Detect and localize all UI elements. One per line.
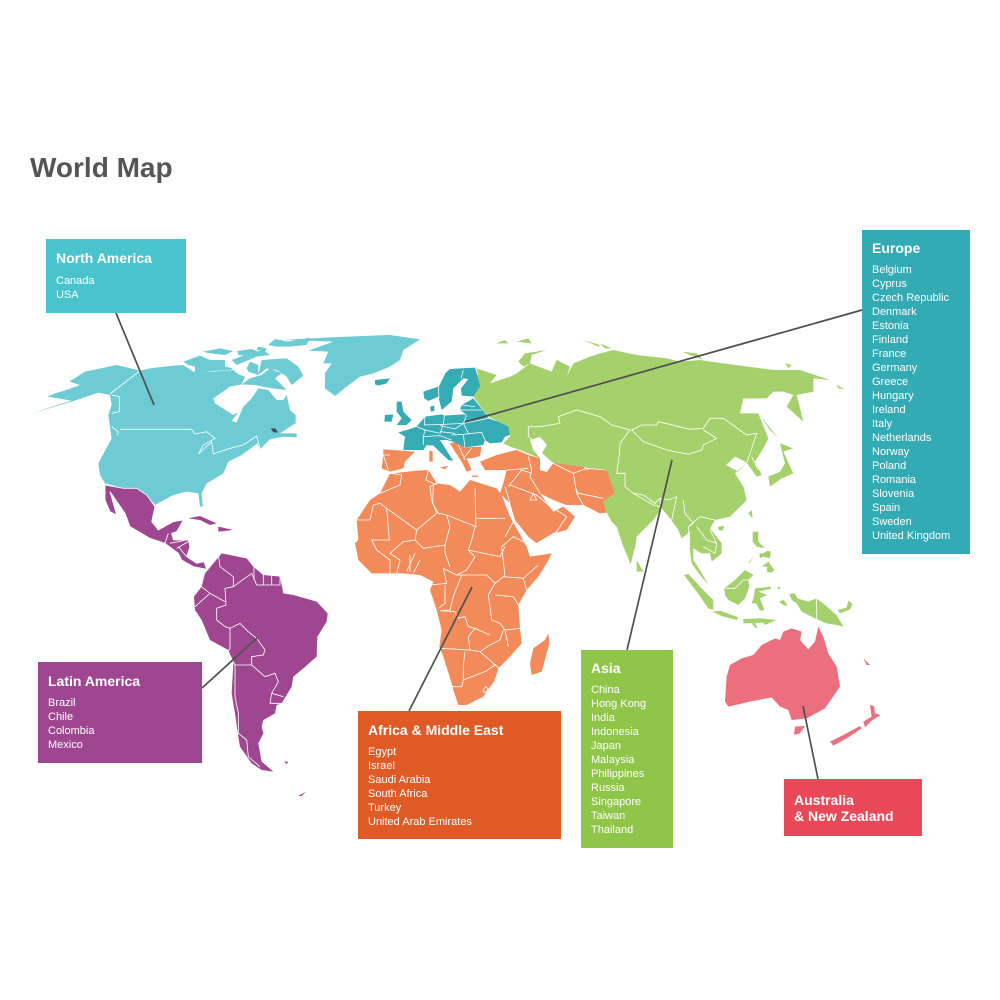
Africa (355, 470, 552, 705)
panel: North America: Canada USA (56, 275, 95, 301)
panel: Europe (862, 230, 970, 554)
title: World Map (30, 152, 173, 183)
Caspian Sea (530, 437, 553, 472)
Iberia, Mediterranean islands, Balkans and Middle East (382, 441, 618, 543)
panel: North America: North America (56, 250, 152, 266)
region: North America (32, 335, 420, 507)
panel: Asia: China Hong Kong India Indonesia Japan Malaysia Philippines Russia Singapore Taiwan Thailand (591, 684, 646, 836)
connector: Latin America (202, 638, 257, 688)
panel: Africa and Middle East: Egypt Israel Saudi Arabia South Africa Turkey United Arab Emirates (368, 746, 472, 828)
connector: North America (116, 313, 154, 405)
Asian mainland (473, 338, 845, 585)
panel: Australia and New Zealand (784, 779, 922, 836)
South America (194, 553, 328, 796)
region: Asia (473, 338, 853, 628)
panel: Latin America: Brazil Chile Colombia Mexico (48, 697, 94, 751)
connector: Australia (803, 706, 818, 779)
panel: Latin America (38, 662, 202, 763)
panel: Africa and Middle East: Africa & Middle East (368, 722, 503, 738)
connector: Africa and Middle East (409, 587, 472, 711)
Southeast Asian islands (684, 526, 853, 628)
panel: Latin America: Latin America (48, 673, 140, 689)
panel: Europe: Europe (872, 240, 920, 256)
panel: Asia: Asia (591, 660, 621, 676)
panel: Africa and Middle East (358, 711, 561, 839)
panel: Asia (581, 650, 673, 848)
region: Latin America (105, 485, 328, 796)
Mexico, Central America and Caribbean (105, 485, 233, 569)
panel: Australia and New Zealand: & New Zealand (794, 808, 894, 824)
region: Australia and New Zealand (725, 627, 881, 746)
connector: Europe (465, 310, 862, 422)
panel: North America (46, 239, 186, 313)
region: Africa and Middle East (355, 441, 618, 705)
panel: Australia and New Zealand: Australia (794, 792, 854, 808)
panel: Europe: Belgium Cyprus Czech Republic Denmark Estonia Finland France Germany Greece Hungary Ireland Italy Netherlands Norway Poland Romania Slovenia Spain Sweden United Kingdom (872, 264, 950, 542)
connector: Asia (627, 460, 672, 650)
region: Europe (375, 368, 510, 461)
